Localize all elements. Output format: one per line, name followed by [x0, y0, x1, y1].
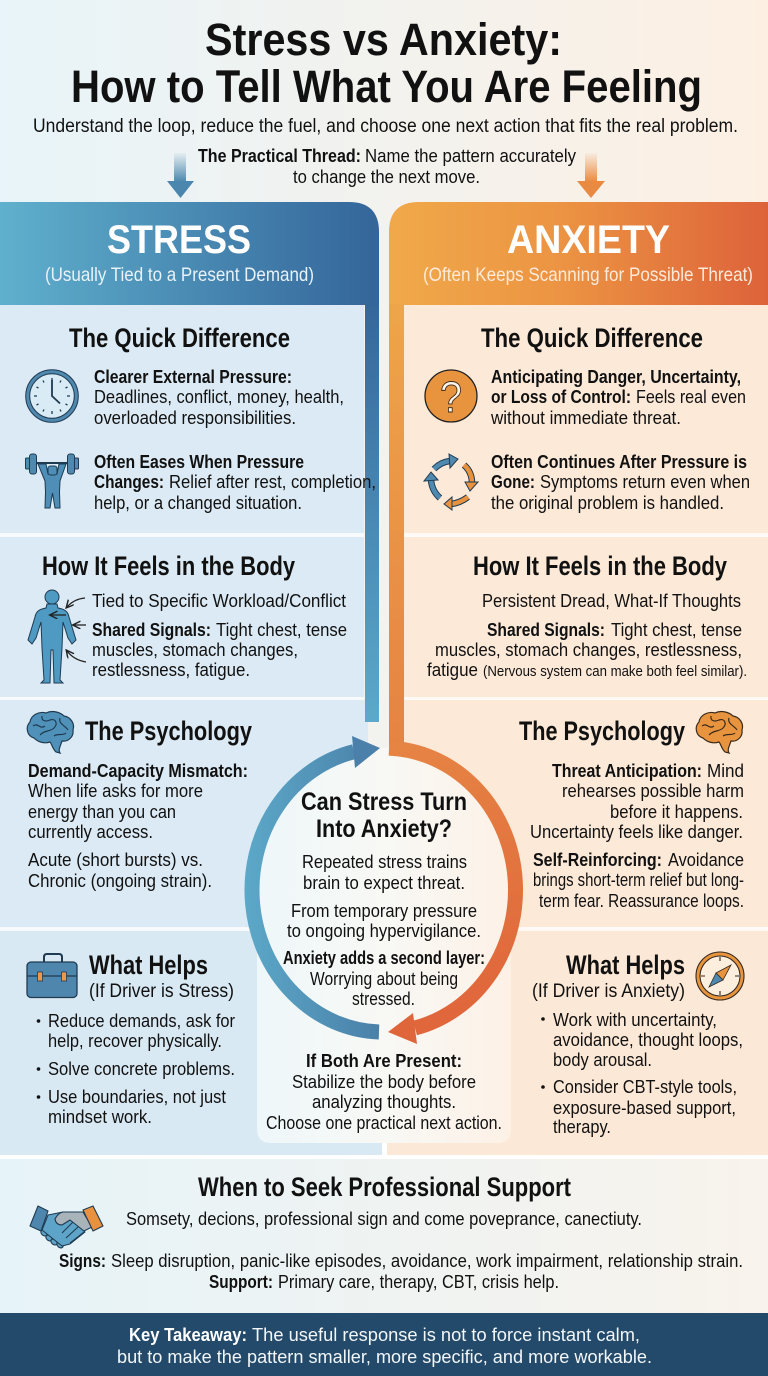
text: threat anticipation: Avoidance	[668, 849, 744, 870]
list: stress actions: mindset work.	[48, 1106, 152, 1127]
text: body signals: Persistent Dread, What-If Thoughts	[482, 590, 741, 611]
text: threat anticipation	[530, 760, 744, 911]
text: often eases: Changes:	[94, 471, 164, 492]
icon: handshake	[30, 1206, 103, 1249]
list: anxiety actions: Work with uncertainty,	[553, 1009, 717, 1030]
text: what helps heading	[89, 950, 234, 1002]
text: anticipating danger: without immediate threat.	[490, 407, 681, 428]
text: what helps heading: What Helps	[89, 950, 208, 980]
list: stress actions: help, recover physically.	[48, 1030, 222, 1051]
stress: how it feels in the body	[28, 551, 347, 683]
text: demand-capacity mismatch: When life asks for more	[28, 780, 203, 801]
text: body signals: Tied to Specific Workload/Conflict	[92, 590, 346, 611]
anxiety frame	[389, 202, 768, 756]
text: clearer external pressure: overloaded responsibilities.	[94, 407, 296, 428]
anxiety: the quick difference: The Quick Difference	[481, 323, 703, 353]
text: what helps heading: What Helps	[566, 950, 685, 980]
arrow: orange loop arc	[388, 748, 516, 1044]
center text: if both are present: Stabilize the body before	[292, 1071, 476, 1092]
text: demand-capacity mismatch: Demand-Capacity Mismatch:	[28, 760, 248, 781]
stress: the quick difference	[26, 323, 376, 513]
center text: can stress turn into anxiety: Into Anxiety?	[316, 815, 452, 843]
stress: the psychology: The Psychology	[85, 716, 252, 746]
stress row backgrounds	[0, 305, 382, 1155]
text: threat anticipation: before it happens.	[610, 801, 743, 822]
text: often continues: Gone:	[491, 471, 535, 492]
banner: key takeaway: The useful response is not to force instant calm,	[252, 1324, 640, 1345]
text: anticipating danger: Feels real even	[636, 386, 746, 407]
center text: can stress turn into anxiety: stressed.	[352, 988, 415, 1009]
list: stress actions: Reduce demands, ask for	[48, 1010, 235, 1031]
center text: can stress turn into anxiety: Can Stress Turn	[301, 788, 467, 816]
text: clearer external pressure	[94, 366, 344, 428]
list: stress actions	[37, 1010, 235, 1127]
text: body signals: fatigue	[427, 659, 478, 680]
text: threat anticipation: Threat Anticipation:	[552, 760, 702, 781]
icon: body with arrows	[28, 590, 86, 683]
stress header: STRESS	[107, 218, 251, 262]
text: anticipating danger	[490, 366, 746, 428]
text: body signals: Tight chest, tense	[611, 619, 742, 640]
text: often continues: the original problem is handled.	[491, 492, 724, 513]
icon: orange brain	[696, 712, 743, 753]
list: stress actions: Solve concrete problems.	[48, 1058, 235, 1079]
signs and support: Support:	[209, 1271, 273, 1292]
icon: compass	[696, 952, 744, 1000]
banner: key takeaway: but to make the pattern smaller, more specific, and more workable.	[117, 1346, 652, 1367]
anxiety row backgrounds	[387, 305, 768, 1155]
icon: cycle arrows	[424, 454, 478, 510]
text: often continues	[491, 451, 750, 513]
text: body signals: Shared Signals:	[487, 619, 605, 640]
practical thread note: The Practical Thread:	[198, 145, 361, 166]
arrow: down to stress	[167, 153, 194, 198]
text: clearer external pressure: Clearer External Pressure:	[94, 366, 292, 387]
banner: key takeaway	[0, 1313, 768, 1376]
list: anxiety actions: avoidance, thought loops,	[553, 1029, 743, 1050]
banner: key takeaway: Key Takeaway:	[129, 1324, 247, 1345]
anxiety header	[423, 218, 753, 286]
panel: when to seek professional support	[0, 1155, 768, 1313]
list: anxiety actions: body arousal.	[553, 1049, 652, 1070]
text: threat anticipation: Self-Reinforcing:	[533, 849, 662, 870]
text: demand-capacity mismatch: Chronic (ongoing strain).	[28, 870, 212, 891]
text: often eases	[94, 451, 376, 513]
arrow: blue loop arc	[252, 736, 380, 1032]
support intro: Somsety, decions, professional sign and come poveprance, canectiuty.	[126, 1208, 642, 1229]
text: what helps heading: (If Driver is Anxiety)	[532, 980, 685, 1002]
text: demand-capacity mismatch: energy than you can	[28, 801, 176, 822]
center text: can stress turn into anxiety: Repeated stress trains	[302, 851, 467, 872]
icon: question mark: ?	[440, 373, 462, 422]
text: body signals: muscles, stomach changes,	[92, 639, 298, 660]
anxiety: the quick difference	[424, 323, 750, 513]
list: anxiety actions: exposure-based support,	[553, 1097, 736, 1118]
title: How to Tell What You Are Feeling	[71, 61, 702, 112]
center card: if both are present	[257, 950, 511, 1143]
stress: what helps	[27, 950, 235, 1127]
center text: can stress turn into anxiety: Worrying about being	[310, 968, 458, 989]
list: anxiety actions: therapy.	[553, 1116, 611, 1137]
list: anxiety actions: Consider CBT-style tools,	[553, 1076, 737, 1097]
signs and support: Signs:	[59, 1250, 106, 1271]
title	[71, 14, 702, 112]
text: body signals	[92, 590, 347, 680]
stress frame	[0, 202, 379, 722]
stress header: (Usually Tied to a Present Demand)	[45, 264, 314, 286]
center text: can stress turn into anxiety	[283, 788, 485, 1009]
signs and support	[59, 1250, 743, 1292]
arrow: down to anxiety	[577, 153, 605, 198]
anxiety: the psychology	[519, 712, 744, 911]
panel: stress column	[0, 202, 382, 1155]
text: what helps heading: (If Driver is Stress)	[89, 980, 234, 1002]
center text: if both are present: If Both Are Present:	[306, 1050, 462, 1071]
center text: can stress turn into anxiety: Anxiety adds a second layer:	[283, 947, 485, 968]
anxiety: the psychology: The Psychology	[519, 716, 685, 746]
stress header	[45, 218, 314, 286]
center text: can stress turn into anxiety: From temporary pressure	[291, 900, 477, 921]
text: often eases: Often Eases When Pressure	[94, 451, 304, 472]
center text: if both are present: Choose one practical next action.	[266, 1112, 502, 1133]
text: threat anticipation: Uncertainty feels like danger.	[530, 821, 743, 842]
list: stress actions: Use boundaries, not just	[48, 1086, 226, 1107]
text: often eases: Relief after rest, completion,	[169, 471, 376, 492]
icon: question mark	[425, 370, 477, 422]
text: often eases: help, or a changed situation.	[94, 492, 302, 513]
text: demand-capacity mismatch: Acute (short bursts) vs.	[28, 849, 203, 870]
anxiety: how it feels in the body	[427, 551, 747, 680]
text: body signals: (Nervous system can make both feel similar).	[483, 664, 747, 680]
text: body signals: Shared Signals:	[92, 619, 211, 640]
stress: how it feels in the body: How It Feels in the Body	[42, 551, 295, 581]
text: demand-capacity mismatch	[28, 760, 248, 891]
icon: weightlifter	[26, 454, 78, 508]
signs and support: Primary care, therapy, CBT, crisis help.	[278, 1271, 559, 1292]
center text: if both are present	[266, 1050, 502, 1133]
text: body signals: Tight chest, tense	[216, 619, 347, 640]
practical thread note: to change the next move.	[293, 166, 480, 187]
text: body signals: muscles, stomach changes, restlessness,	[435, 639, 742, 660]
anxiety header: ANXIETY	[507, 218, 670, 262]
icon: clock	[26, 370, 78, 422]
text: threat anticipation: rehearses possible harm	[562, 780, 744, 801]
text: anticipating danger: or Loss of Control:	[491, 386, 631, 407]
text: demand-capacity mismatch: currently access.	[28, 821, 153, 842]
text: body signals	[427, 590, 747, 680]
text: body signals: restlessness, fatigue.	[92, 659, 250, 680]
center text: if both are present: analyzing thoughts.	[312, 1091, 456, 1112]
icon: blue brain	[27, 712, 74, 753]
practical thread note	[198, 145, 577, 187]
support heading: When to Seek Professional Support	[198, 1172, 571, 1202]
text: threat anticipation: Mind	[707, 760, 744, 781]
center text: can stress turn into anxiety: to ongoing hypervigilance.	[287, 920, 481, 941]
text: what helps heading	[532, 950, 685, 1002]
anxiety: what helps	[532, 950, 744, 1137]
list: anxiety actions	[541, 1009, 743, 1137]
panel: anxiety column	[387, 202, 768, 1155]
center loop background	[252, 748, 516, 1032]
center text: can stress turn into anxiety: brain to expect threat.	[303, 872, 465, 893]
practical thread note: Name the pattern accurately	[365, 145, 577, 166]
stress: the psychology	[27, 712, 252, 891]
stress: the quick difference: The Quick Difference	[69, 323, 290, 353]
text: clearer external pressure: Deadlines, conflict, money, health,	[94, 386, 344, 407]
icon: toolbox	[27, 954, 77, 998]
title: Stress vs Anxiety:	[205, 14, 562, 65]
